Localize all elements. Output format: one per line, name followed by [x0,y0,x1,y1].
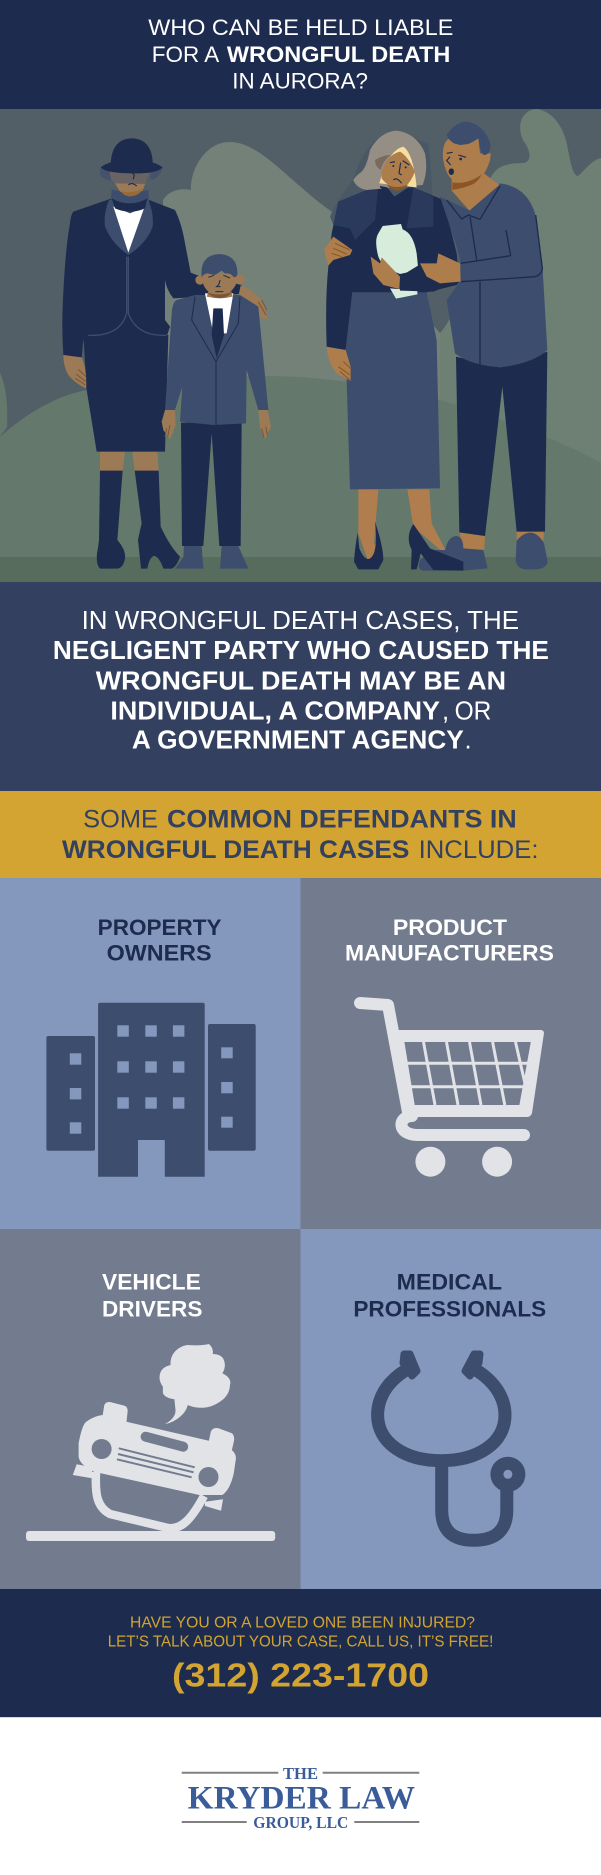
heading: property owners: OWNERS [107,941,212,966]
defendants heading text: INCLUDE: [419,837,538,864]
logo: The Kryder Law Group: THE [283,1764,318,1783]
statement text: NEGLIGENT PARTY WHO CAUSED THE [53,637,549,665]
heading: product manufacturers: MANUFACTURERS [345,941,554,966]
defendants heading text: WRONGFUL DEATH CASES [62,837,409,864]
defendants heading text: SOME [83,807,158,834]
statement text: OR [455,697,491,725]
call to action text: HAVE YOU OR A LOVED ONE BEEN INJURED? [130,1614,475,1631]
panel: intro statement [0,582,601,791]
heading: medical professionals: PROFESSIONALS [353,1297,546,1322]
illustration: family at funeral [0,109,601,582]
defendants heading text [62,807,538,864]
title banner [0,0,601,109]
statement text: WRONGFUL DEATH MAY BE AN [96,667,506,695]
heading: property owners [98,915,222,966]
icon: overturned car [26,1344,275,1541]
heading: medical professionals: MEDICAL [397,1269,502,1294]
heading: product manufacturers: PRODUCT [393,915,508,940]
panel: vehicle drivers [0,1229,300,1589]
title: WRONGFUL DEATH [227,42,450,67]
figure: woman in hat [62,138,268,569]
heading: vehicle drivers: DRIVERS [102,1297,202,1322]
heading: property owners: PROPERTY [98,915,222,940]
panel: defendants heading [0,791,601,878]
defendants heading text: COMMON DEFENDANTS IN [167,807,517,834]
heading: product manufacturers [345,915,554,966]
logo: The Kryder Law Group: GROUP, LLC [253,1813,348,1832]
statement text: , [442,697,449,725]
title: IN AURORA? [232,68,368,93]
statement text: IN WRONGFUL DEATH CASES, THE [82,607,519,635]
statement text: INDIVIDUAL, A COMPANY [110,697,440,725]
title [148,15,453,93]
title: FOR A [152,42,219,67]
statement text [53,607,549,755]
heading: medical professionals [353,1269,546,1322]
panel: product manufacturers [300,878,601,1229]
panel: call to action [0,1589,601,1717]
panel: medical professionals [300,1229,601,1589]
icon: shopping cart [360,1003,544,1177]
phone number: (312) 223-1700 [172,1657,429,1694]
icon: buildings [46,1003,256,1177]
figure: man comforting woman [324,122,548,571]
heading: vehicle drivers: VEHICLE [102,1269,201,1294]
figure: boy [162,254,271,569]
logo: The Kryder Law Group [0,1717,601,1875]
call to action text: LET’S TALK ABOUT YOUR CASE, CALL US, IT’S FREE! [108,1633,493,1650]
panel: property owners [0,878,300,1229]
figure: older woman holding urn [326,131,459,569]
icon: stethoscope [378,1354,525,1540]
heading: vehicle drivers [102,1269,202,1322]
logo: The Kryder Law Group: KRYDER LAW [188,1780,415,1816]
statement text: A GOVERNMENT AGENCY [132,727,464,755]
title: WHO CAN BE HELD LIABLE [148,15,453,40]
statement text: . [464,727,472,755]
call to action text [108,1614,493,1650]
